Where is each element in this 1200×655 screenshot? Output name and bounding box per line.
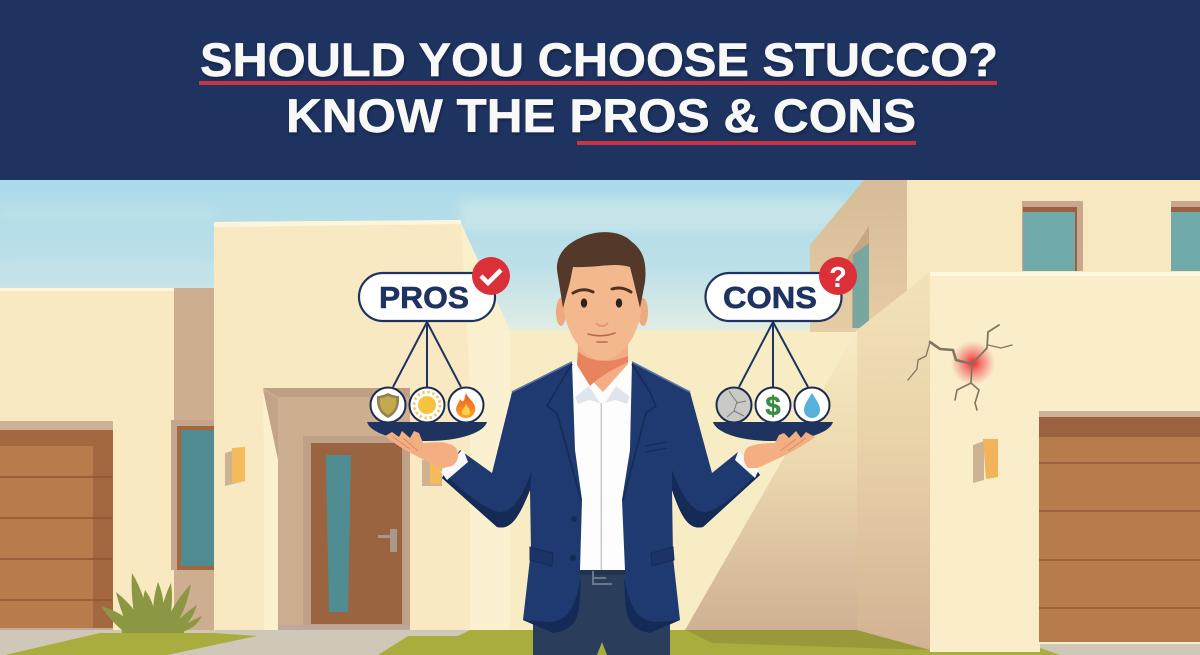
jacket	[442, 362, 760, 633]
recessed entry	[263, 388, 410, 636]
pros scale	[359, 257, 510, 468]
cons strings	[739, 322, 808, 387]
eyes	[581, 298, 587, 308]
icon: flame	[448, 388, 484, 422]
right hand	[744, 431, 815, 468]
sky	[0, 180, 900, 340]
title line two: KNOW THE PROS & CONS	[286, 89, 916, 142]
title line one: SHOULD YOU CHOOSE STUCCO?	[200, 33, 998, 86]
nose	[596, 323, 608, 326]
ground	[0, 630, 1200, 655]
belt buckle	[593, 571, 612, 584]
head	[556, 232, 648, 360]
wall lamp right	[973, 439, 998, 483]
icon: water drop	[794, 388, 830, 422]
cons label pill: CONS	[723, 280, 817, 315]
upper window two	[1171, 201, 1200, 271]
agave plant	[101, 573, 202, 633]
jacket shading	[442, 470, 532, 528]
header banner	[0, 0, 1200, 180]
lapels	[547, 364, 581, 500]
person	[441, 232, 760, 655]
building: upper right storey	[810, 180, 1200, 332]
pros label pill: PROS	[379, 280, 469, 315]
cons label pill	[706, 273, 842, 321]
left garage door	[0, 421, 113, 631]
icon: cracked stucco	[716, 388, 752, 422]
left cuff	[441, 449, 468, 480]
building: left garage wing	[0, 288, 214, 633]
icon: dollar	[756, 388, 790, 422]
building: tower and door recess	[214, 220, 510, 640]
front door	[278, 436, 410, 636]
pros strings	[393, 322, 461, 387]
left hand	[385, 431, 458, 468]
icon: shield	[370, 388, 406, 422]
question badge	[819, 257, 857, 295]
right garage door	[1039, 411, 1200, 642]
building: right garage wing	[857, 272, 1200, 652]
icon: dollar: $	[765, 391, 781, 421]
stucco crack	[908, 325, 1012, 410]
trousers	[533, 565, 670, 655]
rear wall behind person	[410, 330, 860, 632]
pros tray	[367, 422, 487, 441]
side window	[845, 226, 869, 328]
eyebrows	[573, 288, 631, 293]
hair	[557, 232, 645, 308]
upper window one	[1022, 201, 1083, 271]
pockets and buttons	[530, 547, 553, 566]
check badge	[472, 257, 510, 295]
neck and collar	[575, 345, 630, 570]
cons scale	[706, 257, 857, 468]
left window	[171, 420, 214, 570]
illustrated street scene	[0, 180, 1200, 655]
pros label pill	[359, 273, 495, 321]
cons tray	[713, 422, 833, 441]
side wall shadow on lawn	[686, 630, 930, 650]
icon: sun	[410, 388, 444, 422]
sloped side wall	[685, 330, 857, 630]
question badge: ?	[829, 262, 847, 294]
wall lamp centre	[422, 460, 442, 486]
right cuff	[735, 452, 760, 478]
wall lamp left	[225, 447, 245, 486]
mouth	[588, 333, 615, 342]
shirt	[572, 362, 632, 570]
